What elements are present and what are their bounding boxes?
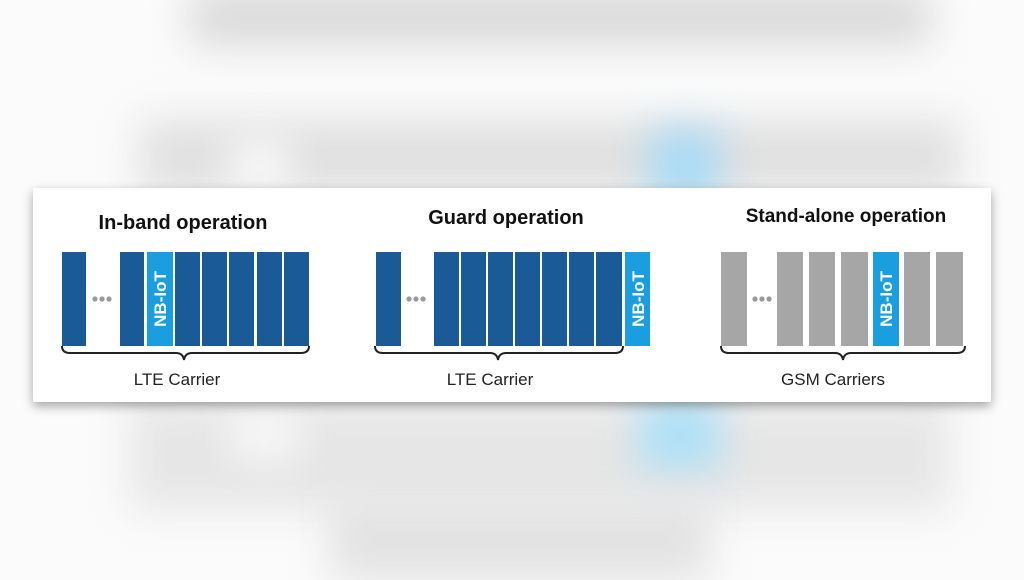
carrier bars: guard <box>376 252 622 346</box>
heading: guard: Guard operation <box>428 207 584 229</box>
heading: in-band: In-band operation <box>99 212 267 234</box>
section: guard operation <box>375 207 650 389</box>
NB-IoT block: in-band: NB-IoT <box>151 271 170 327</box>
section: stand-alone operation <box>721 206 965 389</box>
ellipsis dots <box>752 296 772 302</box>
ellipsis dots <box>92 296 112 302</box>
ellipsis dots <box>406 296 426 302</box>
section: in-band operation <box>62 212 309 389</box>
NB-IoT block: in-band <box>147 252 173 346</box>
panel: NB-IoT operation modes <box>33 188 991 402</box>
brace: LTE carrier <box>375 346 623 360</box>
NB-IoT block: guard <box>625 252 650 346</box>
NB-IoT block: guard: NB-IoT <box>629 271 648 327</box>
carrier bars: GSM <box>721 252 963 346</box>
label: GSM Carriers: GSM Carriers <box>781 370 885 389</box>
label: LTE Carrier: LTE Carrier <box>134 370 221 389</box>
NB-IoT block: stand-alone: NB-IoT <box>877 271 896 327</box>
NB-IoT block: stand-alone <box>873 252 899 346</box>
brace: LTE carrier <box>62 346 309 360</box>
label: LTE Carrier: LTE Carrier <box>447 370 534 389</box>
carrier bars: in-band <box>62 252 309 346</box>
brace: GSM carriers <box>721 346 965 360</box>
heading: stand-alone: Stand-alone operation <box>746 206 946 227</box>
